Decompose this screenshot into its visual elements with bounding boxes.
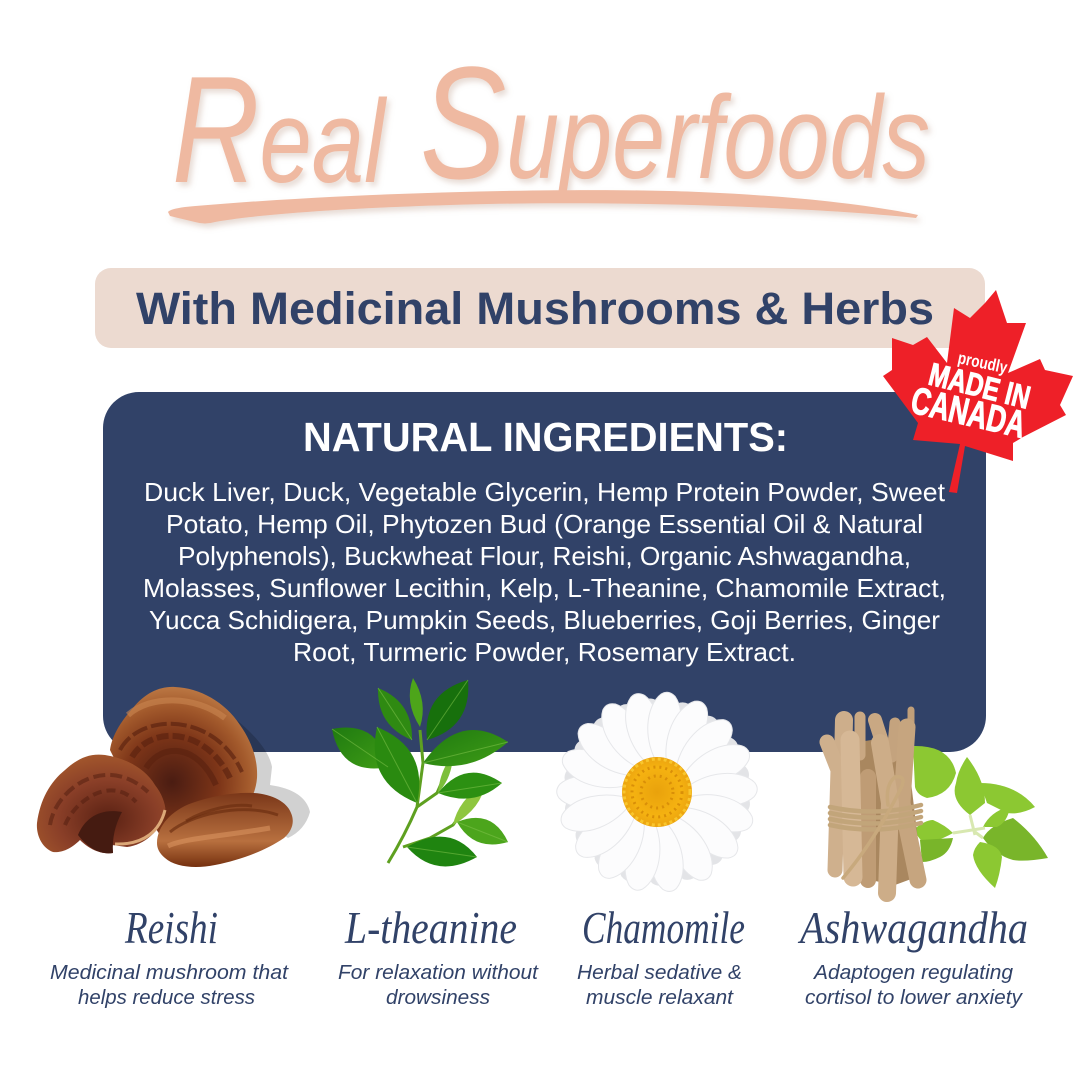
panel heading: NATURAL INGREDIENTS: xyxy=(303,414,788,460)
item: Chamomile: Chamomile xyxy=(582,902,745,953)
icon: chamomile flower xyxy=(557,691,758,894)
title xyxy=(168,33,930,224)
icon: L-theanine tea sprig xyxy=(332,678,508,866)
subtitle banner: With Medicinal Mushrooms & Herbs xyxy=(136,283,934,334)
item: Reishi: helps reduce stress xyxy=(78,987,255,1009)
item: Ashwagandha: cortisol to lower anxiety xyxy=(805,987,1023,1009)
item: L-theanine: drowsiness xyxy=(386,987,490,1009)
title: Superfoods xyxy=(420,33,930,212)
item: L-theanine xyxy=(338,902,540,1009)
ingredients list: Duck Liver, Duck, Vegetable Glycerin, Hemp Protein Powder, Sweet xyxy=(144,477,946,507)
item: Reishi: Reishi xyxy=(124,902,218,953)
item: Chamomile: Herbal sedative & xyxy=(577,962,742,984)
panel: natural ingredients xyxy=(103,392,986,752)
badge: proudly made in Canada maple leaf: MADE IN xyxy=(925,356,1034,416)
ingredients list: Yucca Schidigera, Pumpkin Seeds, Blueberries, Goji Berries, Ginger xyxy=(149,605,940,635)
item: Reishi xyxy=(50,902,290,1009)
item: L-theanine: L-theanine xyxy=(344,902,517,953)
ingredients list: Root, Turmeric Powder, Rosemary Extract. xyxy=(293,637,796,667)
item: Ashwagandha xyxy=(797,902,1028,1009)
badge: proudly made in Canada maple leaf xyxy=(883,290,1073,493)
icon: reishi mushrooms xyxy=(37,687,310,867)
ingredients list: Potato, Hemp Oil, Phytozen Bud (Orange Essential Oil & Natural xyxy=(166,509,923,539)
ingredients list: Molasses, Sunflower Lecithin, Kelp, L-Theanine, Chamomile Extract, xyxy=(143,573,946,603)
title: Real xyxy=(172,45,387,215)
icon: ashwagandha roots and leaves xyxy=(827,710,1048,893)
badge: proudly made in Canada maple leaf: proudly xyxy=(956,348,1009,377)
item: L-theanine: For relaxation without xyxy=(338,962,540,984)
item: Ashwagandha: Ashwagandha xyxy=(797,902,1028,953)
ingredients list: Polyphenols), Buckwheat Flour, Reishi, Organic Ashwagandha, xyxy=(178,541,911,571)
item: Reishi: Medicinal mushroom that xyxy=(50,962,290,984)
item: Ashwagandha: Adaptogen regulating xyxy=(813,962,1013,984)
subtitle banner xyxy=(95,268,985,348)
ingredients list xyxy=(143,477,946,667)
item: Chamomile: muscle relaxant xyxy=(586,987,735,1009)
item: Chamomile xyxy=(577,902,745,1009)
badge: proudly made in Canada maple leaf: CANADA xyxy=(907,380,1029,447)
